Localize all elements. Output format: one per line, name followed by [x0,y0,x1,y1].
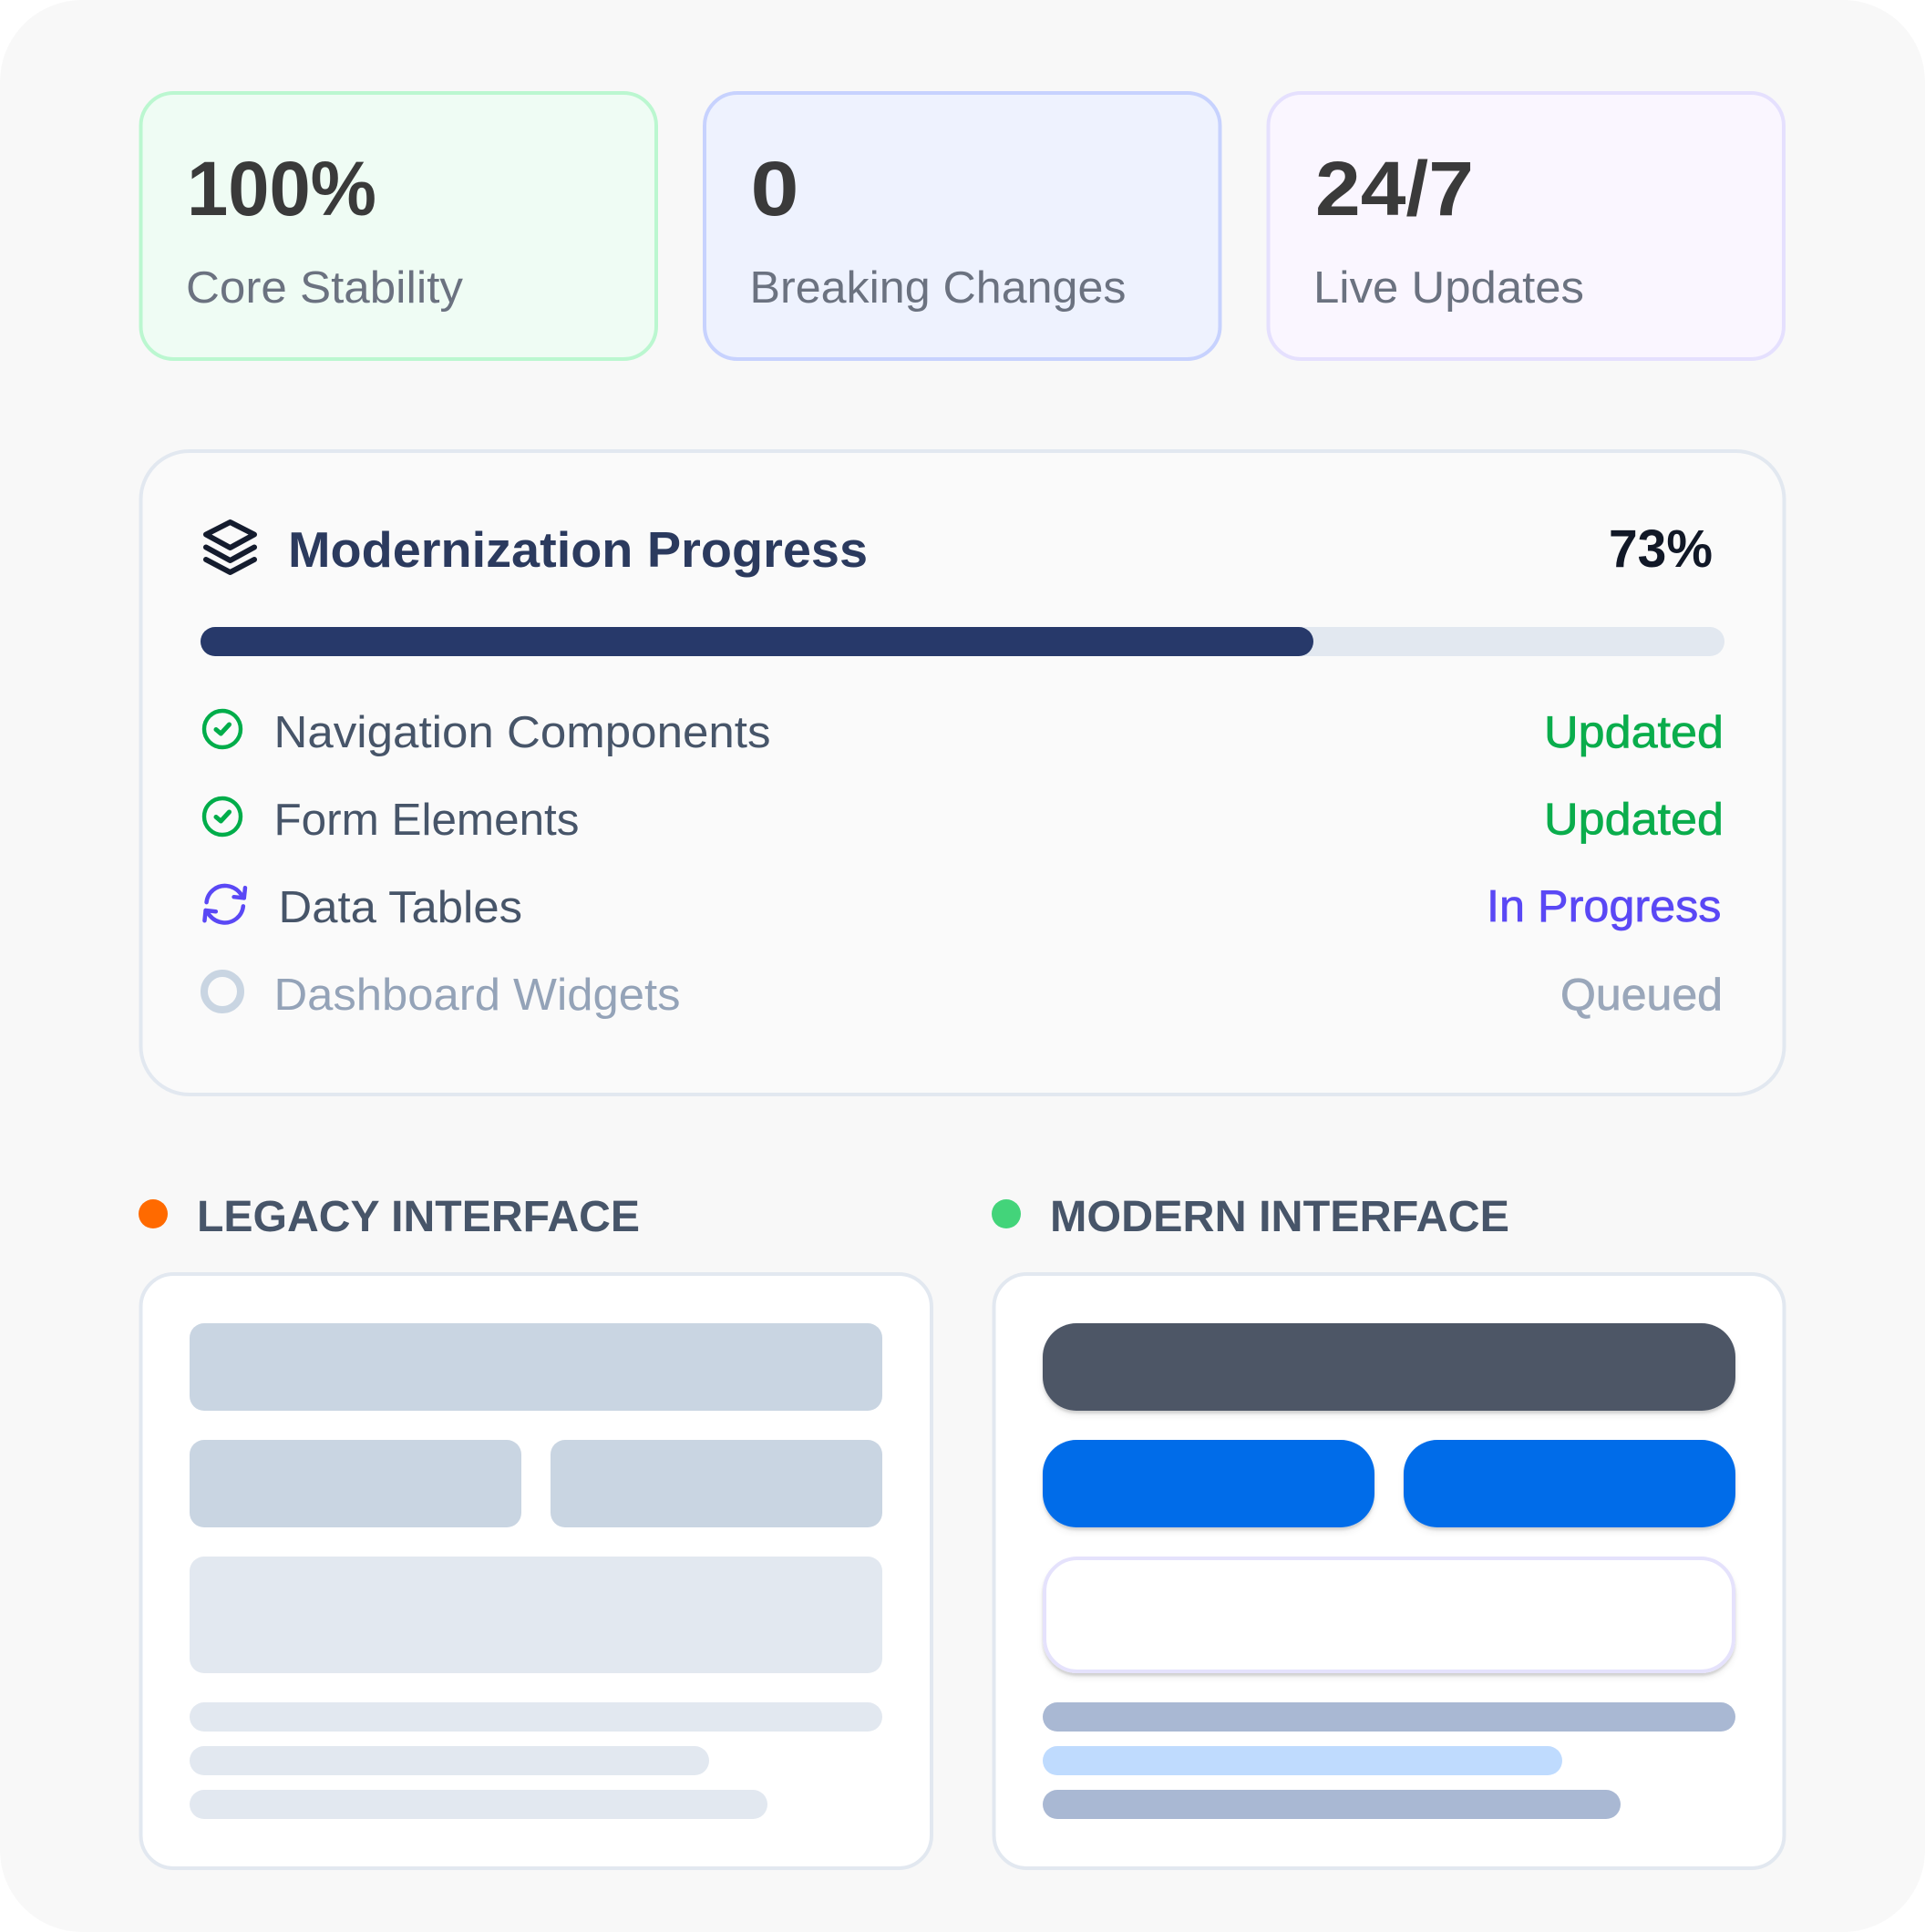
stat value: 100%: 100% [187,146,376,231]
stat value: 24/7: 24/7 [1315,146,1474,231]
row: form elements [204,795,1724,845]
icon: check circle [204,711,241,747]
icon: queued circle [204,973,241,1010]
row: navigation components [204,708,1724,757]
panel: modern interface mockup [993,1274,1785,1868]
legacy right block [551,1440,882,1527]
modern left button [1043,1440,1374,1527]
panel: stat breaking changes [705,93,1220,359]
stat label: core stability: Core Stability [186,263,464,313]
status: queued: Queued [1560,971,1723,1020]
legacy left block [190,1440,521,1527]
modern status dot [992,1199,1021,1228]
progress percentage: 73% [1609,519,1713,579]
heading: modern interface: MODERN INTERFACE [1050,1193,1509,1241]
legacy text lines [190,1702,882,1819]
status: updated: Updated [1544,795,1724,844]
stat label: live updates: Live Updates [1313,263,1584,313]
legacy status dot [139,1199,168,1228]
item label: Navigation Components [273,708,771,757]
panel: modernization progress [140,451,1785,1094]
status: updated: Updated [1544,708,1724,757]
progress bar [201,627,1724,656]
row: dashboard widgets [204,971,1723,1020]
panel: stat live updates [1269,93,1784,359]
item label: Dashboard Widgets [273,971,680,1020]
stat label: breaking changes: Breaking Changes [749,263,1127,313]
legacy content block [190,1557,882,1673]
item label: Data Tables [279,883,522,932]
panel: stat core stability [140,93,656,359]
icon: refresh [204,884,245,924]
modern text lines [1043,1702,1735,1819]
row: data tables [204,882,1722,932]
item label: Form Elements [273,796,580,845]
modern content card [1045,1558,1734,1671]
modern header block [1043,1323,1735,1411]
icon: check circle [204,798,241,835]
heading: modernization progress: Modernization Progress [288,521,868,578]
status: in progress: In Progress [1487,882,1721,931]
panel: legacy interface mockup [140,1274,932,1868]
heading: legacy interface: LEGACY INTERFACE [197,1193,640,1241]
modern right button [1404,1440,1735,1527]
icon: layers [206,522,254,572]
stat value: 0: 0 [751,146,798,231]
legacy header block [190,1323,882,1411]
